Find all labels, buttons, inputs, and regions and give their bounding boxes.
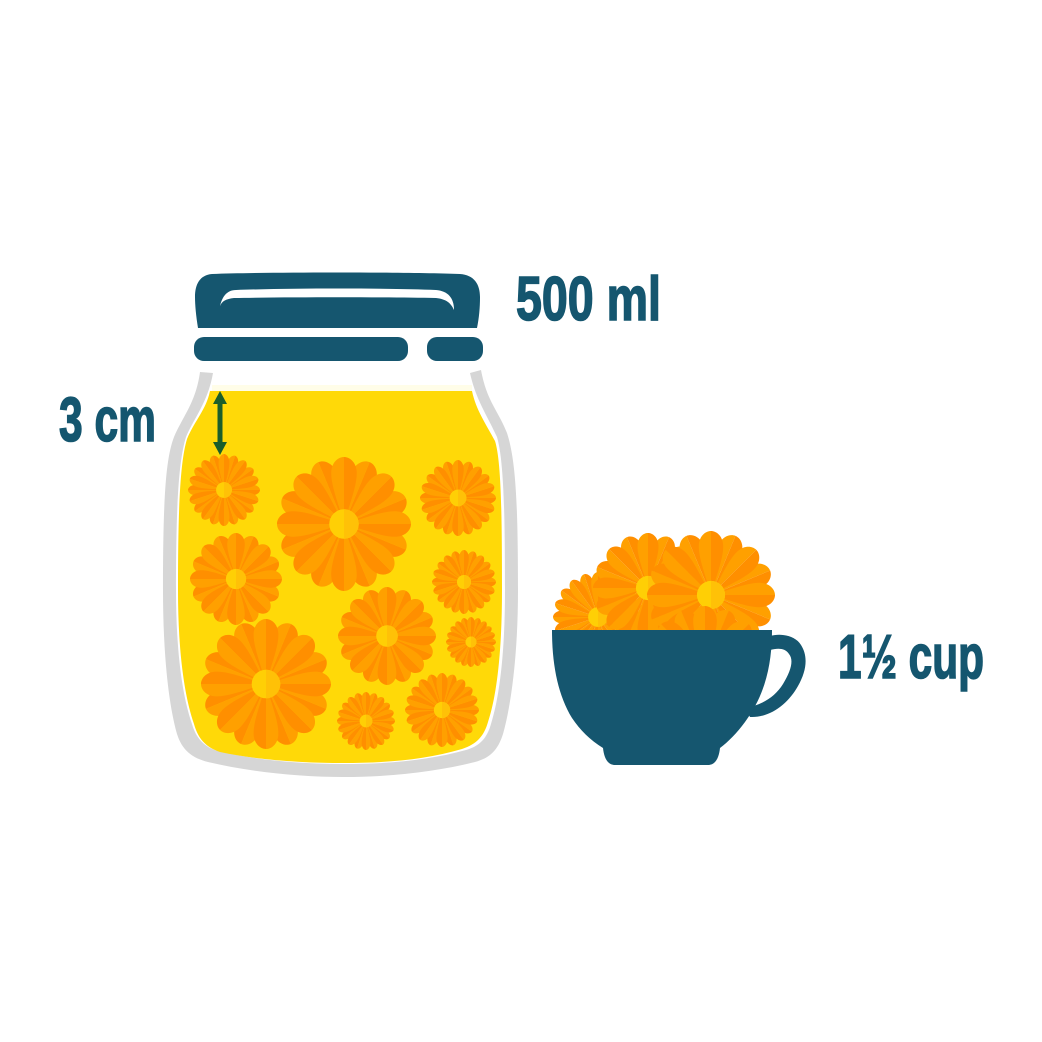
jar neck band left — [194, 337, 408, 361]
cup handle — [745, 635, 806, 717]
double arrow: 3 cm gap — [213, 391, 227, 455]
oil — [178, 391, 502, 763]
jar glass outline — [163, 370, 518, 777]
oil highlight — [212, 385, 472, 391]
cup flower lower — [658, 606, 752, 630]
jar neck band right — [427, 337, 483, 361]
flowers in cup — [553, 531, 775, 630]
label: 500 ml: 500 ml — [516, 265, 661, 334]
flower 4 — [190, 533, 282, 625]
flower 10 — [405, 673, 479, 747]
cup — [552, 630, 806, 765]
cup flower left — [553, 572, 641, 630]
jar lid — [195, 272, 480, 328]
jar — [163, 272, 518, 777]
flower 1 — [188, 454, 260, 526]
cup body — [552, 630, 772, 765]
flower 3 — [420, 460, 496, 536]
cup flower right — [647, 531, 775, 630]
flower 9 — [337, 692, 395, 750]
flower 5 — [432, 550, 496, 614]
flower 7 — [446, 617, 496, 667]
flower 6 — [338, 587, 436, 685]
cup flower middle — [593, 533, 701, 630]
flower 8 — [201, 619, 331, 749]
flower 2 — [277, 457, 411, 591]
label: 3 cm: 3 cm — [59, 386, 156, 455]
